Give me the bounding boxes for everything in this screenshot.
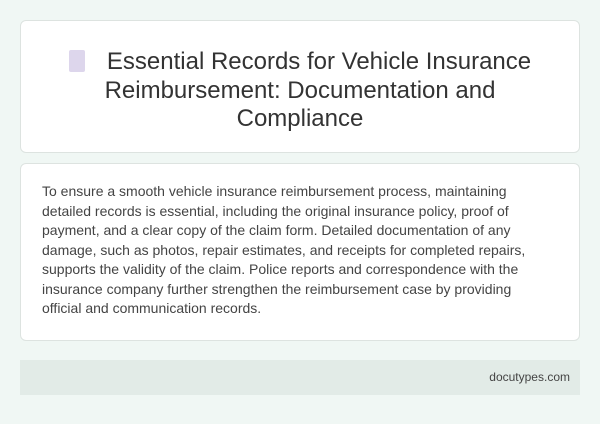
title: Essential Records for Vehicle Insurance [107, 48, 531, 75]
icon: document [69, 50, 85, 72]
panel: description [20, 163, 580, 341]
panel: title [20, 20, 580, 153]
title: Reimbursement: Documentation and [105, 76, 495, 104]
title: Compliance [237, 105, 363, 132]
footer: docutypes.com [489, 370, 570, 384]
text block: To ensure a smooth vehicle insurance reimbursement process, maintaining detailed records is essential, including the original insurance policy, proof of payment, and a clear copy of the claim form. Detailed documentation of any damage, such as photos, repair estimates, and receipts for completed repairs, supports the validity of the claim. Police reports and correspondence with the insurance company further strengthen the reimbursement case by providing official and communication records. [42, 183, 525, 316]
title [69, 48, 531, 132]
footer [20, 360, 580, 395]
